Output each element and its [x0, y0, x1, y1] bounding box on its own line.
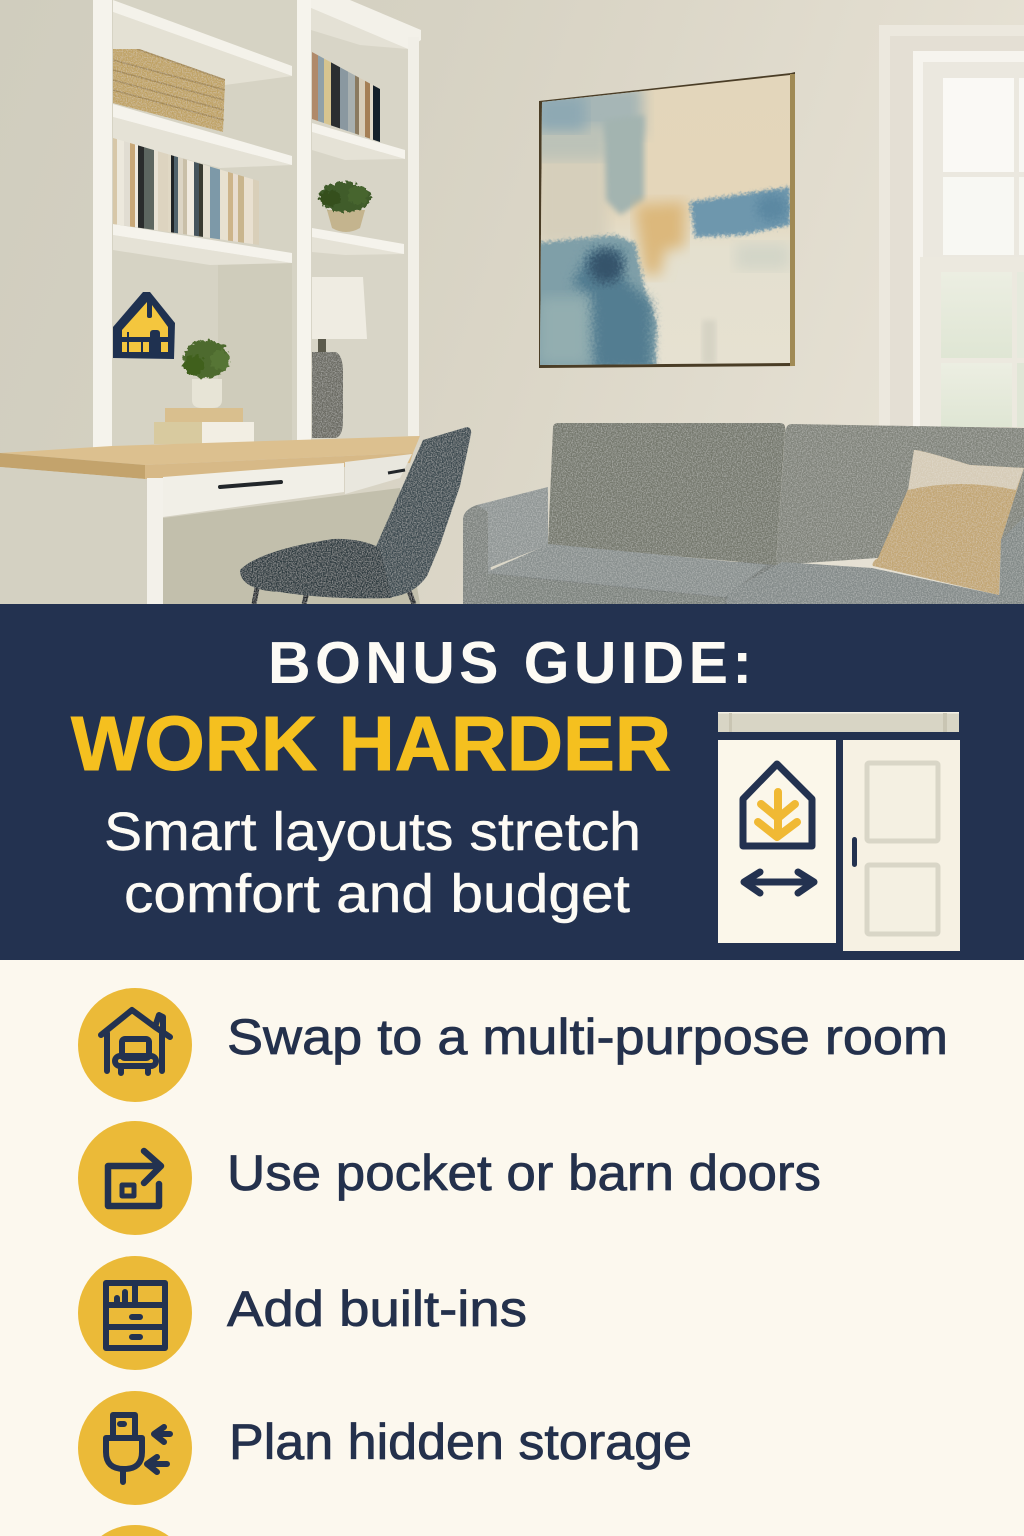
window — [879, 25, 1024, 427]
subheading line 2: comfort and budget — [124, 864, 630, 924]
potted plant on right shelf — [319, 182, 371, 232]
checklist panel — [0, 960, 1024, 1536]
label: Swap to a multi-purpose room — [227, 1009, 948, 1065]
table lamp — [312, 277, 367, 438]
item: hidden storage — [78, 1391, 692, 1505]
left wall panel — [718, 740, 836, 943]
heading: work harder: WORK HARDER — [71, 701, 671, 787]
desk chair — [240, 427, 471, 604]
sliding door illustration — [718, 712, 960, 951]
wall-mounted house icon — [113, 292, 175, 359]
subheading line 1: Smart layouts stretch — [104, 802, 641, 862]
basket — [113, 49, 225, 132]
framed abstract painting — [530, 72, 795, 370]
item: pocket or barn doors — [78, 1121, 821, 1235]
icon: cabinet — [78, 1256, 192, 1370]
built-in bookcase — [93, 0, 421, 457]
double-headed arrow — [744, 872, 814, 893]
sofa — [463, 423, 1024, 604]
books on left shelf — [113, 138, 259, 245]
heading: bonus guide: BONUS GUIDE: — [268, 630, 752, 696]
books on right shelf — [312, 45, 380, 145]
item: multi-purpose room — [78, 988, 948, 1102]
label: Add built-ins — [227, 1281, 527, 1337]
desk with drawers — [0, 436, 420, 604]
sliding door — [843, 740, 960, 951]
label: Use pocket or barn doors — [227, 1145, 821, 1201]
item: built-ins — [78, 1256, 527, 1370]
stacked books on desk — [154, 408, 254, 444]
cropped next item circle — [101, 1525, 169, 1536]
room photo scene — [0, 0, 1024, 604]
icon: house with sofa — [78, 988, 192, 1102]
house icon with down arrow — [743, 764, 812, 846]
icon: sliding door arrow — [78, 1121, 192, 1235]
wall — [0, 0, 1024, 604]
icon: plug with arrows — [78, 1391, 192, 1505]
headline panel — [0, 604, 1024, 960]
potted plant on desk — [183, 340, 230, 408]
label: Plan hidden storage — [229, 1414, 692, 1470]
door track — [718, 712, 959, 732]
